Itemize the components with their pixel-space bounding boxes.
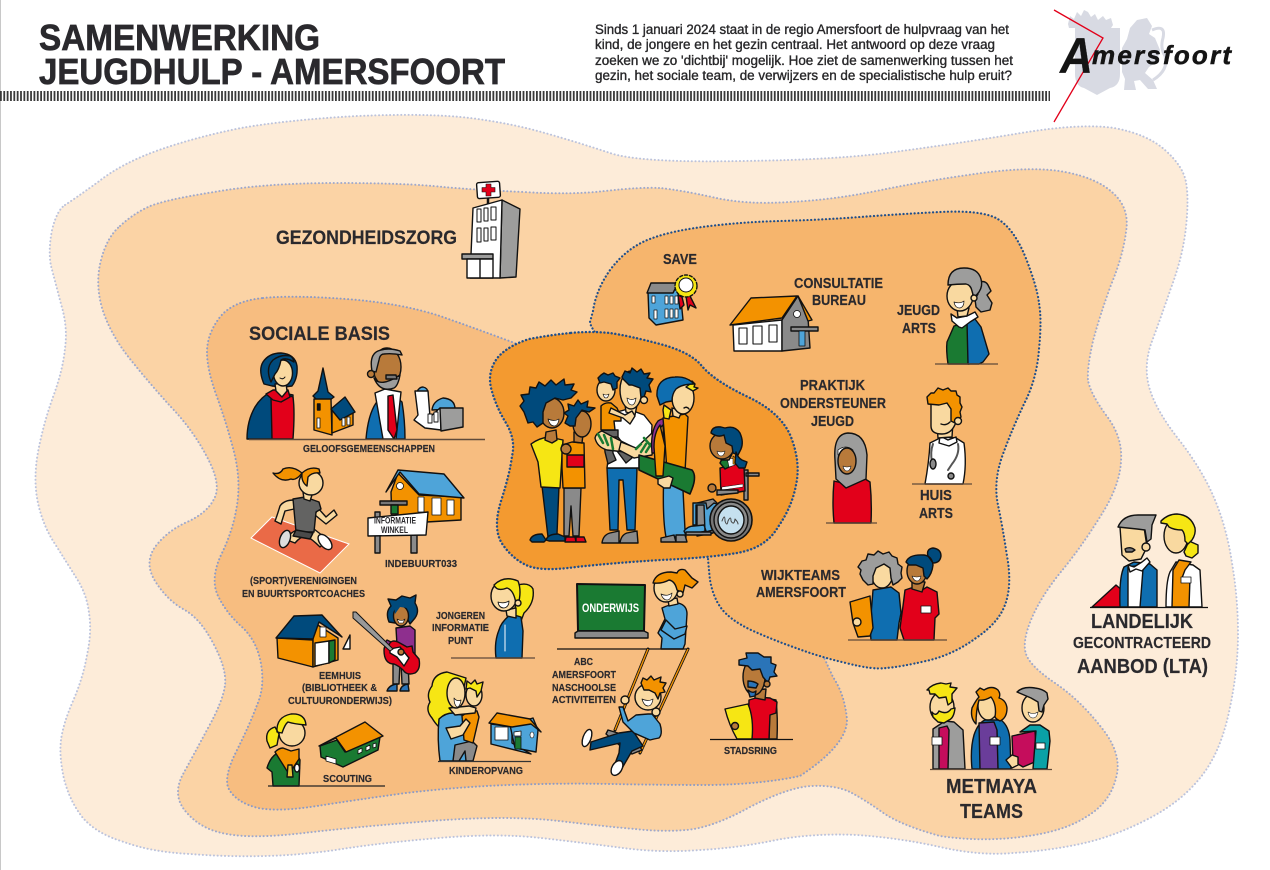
figure: girl in wheelchair (684, 427, 759, 541)
group: kinderopvang: KINDEROPVANG (449, 765, 523, 777)
group: jeugd arts: ARTS (902, 321, 936, 337)
region: sociaal team en huisartsen (590, 212, 1040, 668)
figure: doctor with stethoscope (925, 388, 965, 484)
group: scouting (267, 714, 385, 786)
group: sportverenigingen: EN BUURTSPORTCOACHES (242, 588, 365, 600)
figure: girl with guitar (353, 595, 420, 691)
group: metmaya teams: TEAMS (960, 800, 1023, 823)
group: landelijk gecontracteerd aanbod: AANBOD (LTA) (1077, 655, 1208, 678)
group: stadsring: STADSRING (724, 745, 777, 757)
icon: scout hut (319, 722, 383, 767)
icon: mosque (414, 387, 463, 431)
icon: white house (730, 296, 818, 351)
intro text (595, 22, 1013, 83)
group: landelijk gecontracteerd aanbod (1073, 514, 1211, 678)
group: jongeren informatie punt: INFORMATIE (432, 622, 489, 634)
group: sportverenigingen (242, 468, 365, 600)
figure: three team members (927, 683, 1050, 769)
icon: house with sign (368, 470, 464, 553)
group: kinderopvang (428, 672, 541, 777)
group: family in the centre (520, 368, 759, 543)
heading: gezondheidszorg: GEZONDHEIDSZORG (276, 227, 457, 249)
group: onderwijs: ACTIVITEITEN (552, 694, 616, 706)
group: praktijkondersteuner jeugd (780, 378, 886, 523)
icon: blue house (489, 713, 541, 754)
heading: sociale basis: SOCIALE BASIS (249, 323, 390, 345)
group: huisarts (912, 388, 972, 522)
figure: boy on swing (580, 649, 688, 777)
intro text: kind, de jongere en het gezin centraal. Het antwoord op deze vraag (595, 37, 995, 52)
figure: child (561, 400, 595, 542)
group: indebuurt033 (368, 470, 464, 570)
group: jongeren informatie punt: JONGEREN (436, 610, 485, 622)
group: consultatie bureau: BUREAU (812, 293, 866, 309)
title (39, 17, 505, 92)
figure: mother and child (428, 672, 483, 761)
track (251, 517, 349, 573)
figure: two women with folder (850, 548, 941, 640)
icon: laptop with onderwijs screen: ONDERWIJS (582, 603, 639, 615)
group: geloofsgemeenschappen (247, 348, 485, 455)
group: eemhuis (276, 595, 420, 707)
figure: woman in yellow (520, 379, 577, 542)
figure: teacher (653, 569, 698, 649)
figure: man and woman lta (1092, 514, 1202, 607)
intro text: Sinds 1 januari 2024 staat in de regio Amersfoort de hulpvraag van het (595, 22, 1009, 37)
group: jeugd arts: JEUGD (897, 303, 940, 319)
figure: man with yellow folder (725, 653, 777, 739)
group: onderwijs (552, 569, 698, 777)
logo: Amersfoort: mersfoort (1092, 40, 1232, 70)
group: save: SAVE (663, 252, 697, 268)
intro text: gezin, het sociale team, de verwijzers en de specialistische hulp eruit? (595, 68, 1012, 83)
group: wijkteams amersfoort: WIJKTEAMS (761, 568, 840, 584)
region: gezondheidszorg (second zone) (98, 169, 1127, 839)
figure: woman with yellow hair (491, 579, 533, 658)
group: huisarts: HUIS (920, 488, 952, 504)
group: jongeren informatie punt (432, 579, 535, 658)
group: wijkteams amersfoort (756, 548, 947, 640)
group: eemhuis: EEMHUIS (319, 670, 361, 682)
title: JEUGDHULP - AMERSFOORT (39, 51, 505, 92)
region: sociale basis (207, 297, 847, 810)
intro text: zoeken we zo 'dichtbij' mogelijk. Hoe ziet de samenwerking tussen het (595, 53, 1013, 68)
figure: woman with hijab (833, 433, 871, 523)
group: onderwijs: ABC (574, 656, 593, 668)
icon: house with sign: INFORMATIE (374, 516, 416, 526)
group: geloofsgemeenschappen: GELOOFSGEMEENSCHAPPEN (303, 443, 435, 455)
group: eemhuis: CULTUURONDERWIJS) (288, 695, 392, 707)
group: praktijkondersteuner jeugd: ONDERSTEUNER (780, 396, 886, 412)
group: metmaya teams: METMAYA (946, 775, 1037, 798)
group: jongeren informatie punt: PUNT (448, 635, 474, 647)
icon: house eemhuis (276, 615, 350, 667)
group: praktijkondersteuner jeugd: JEUGD (811, 414, 854, 430)
group: wijkteams amersfoort: AMERSFOORT (756, 585, 846, 601)
figure: scout (267, 714, 306, 786)
group: landelijk gecontracteerd aanbod: LANDELIJK (1091, 610, 1193, 633)
figure: father and toddler (595, 368, 654, 543)
icon: school with rosette (647, 275, 697, 325)
icon: church (313, 368, 355, 435)
figure: runner (273, 468, 337, 552)
icon: hospital (462, 181, 520, 278)
group: jeugd arts (897, 268, 998, 364)
group: landelijk gecontracteerd aanbod: GECONTRACTEERD (1073, 635, 1211, 652)
figure: doctor with ponytail (947, 268, 992, 364)
logo: Amersfoort: A (1058, 28, 1093, 84)
group: metmaya teams (927, 683, 1052, 823)
group: huisarts: ARTS (919, 506, 953, 522)
group: sportverenigingen: (SPORT)VERENIGINGEN (250, 575, 357, 587)
group: stadsring (710, 653, 793, 757)
group: save (647, 252, 697, 325)
group: eemhuis: (BIBLIOTHEEK & (302, 682, 377, 694)
group: onderwijs: NASCHOOLSE (552, 682, 616, 694)
figure: man with beard (366, 348, 405, 439)
region: gezin in het midden (490, 332, 798, 569)
figure: woman in red (247, 353, 297, 439)
group: scouting: SCOUTING (323, 773, 372, 785)
group: consultatie bureau: CONSULTATIE (794, 276, 883, 292)
logo: Amersfoort (1054, 10, 1232, 122)
group: onderwijs: AMERSFOORT (552, 669, 616, 681)
icon: laptop with onderwijs screen (575, 584, 648, 638)
group: praktijkondersteuner jeugd: PRAKTIJK (800, 378, 865, 394)
figure: skater with board (639, 377, 698, 542)
group: consultatie bureau (730, 276, 883, 351)
icon: house with sign: WINKEL (381, 525, 408, 536)
title: SAMENWERKING (39, 17, 320, 58)
group: indebuurt033: INDEBUURT033 (385, 558, 457, 570)
